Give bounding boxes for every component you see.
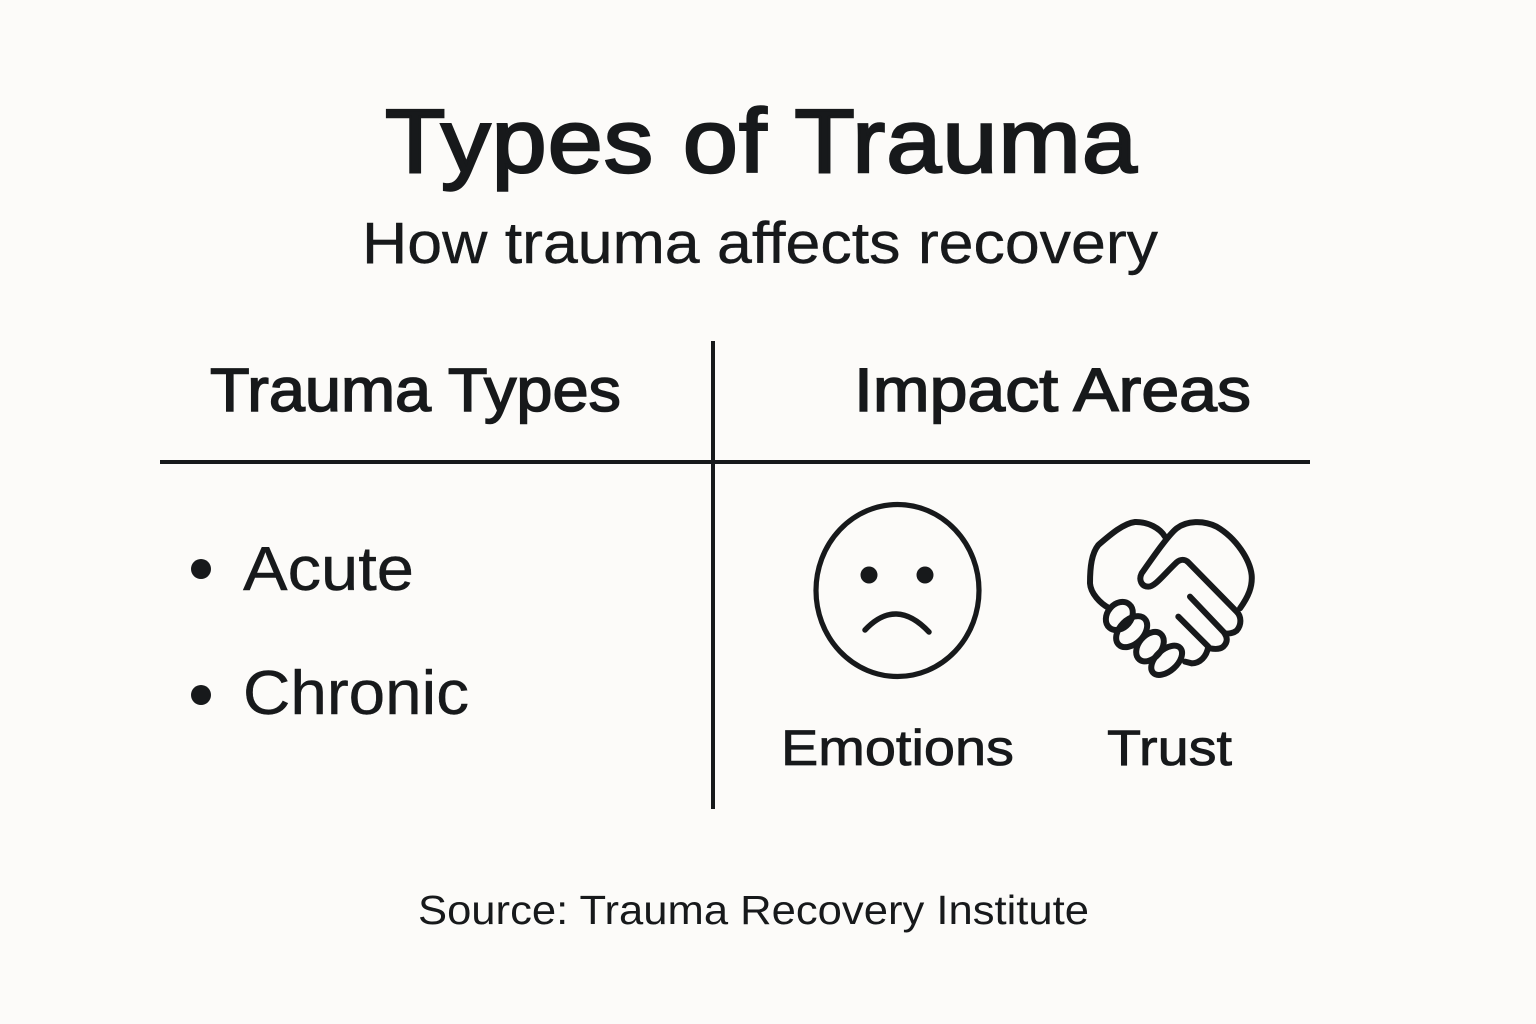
subtitle: How trauma affects recovery — [362, 211, 1158, 276]
heading: Impact Areas: Impact Areas — [854, 356, 1251, 424]
table dividers — [160, 341, 1310, 809]
title: Types of Trauma — [385, 92, 1138, 192]
label: Emotions: Emotions — [781, 720, 1014, 776]
icon: handshake heart — [1090, 522, 1252, 681]
heading: Trauma Types: Trauma Types — [210, 356, 621, 424]
list item: Chronic: Chronic — [243, 659, 469, 728]
source: Source: Trauma Recovery Institute — [418, 887, 1089, 933]
list item: Acute: Acute — [243, 535, 414, 604]
icon: sad face — [816, 504, 979, 676]
label: Trust: Trust — [1107, 720, 1232, 776]
